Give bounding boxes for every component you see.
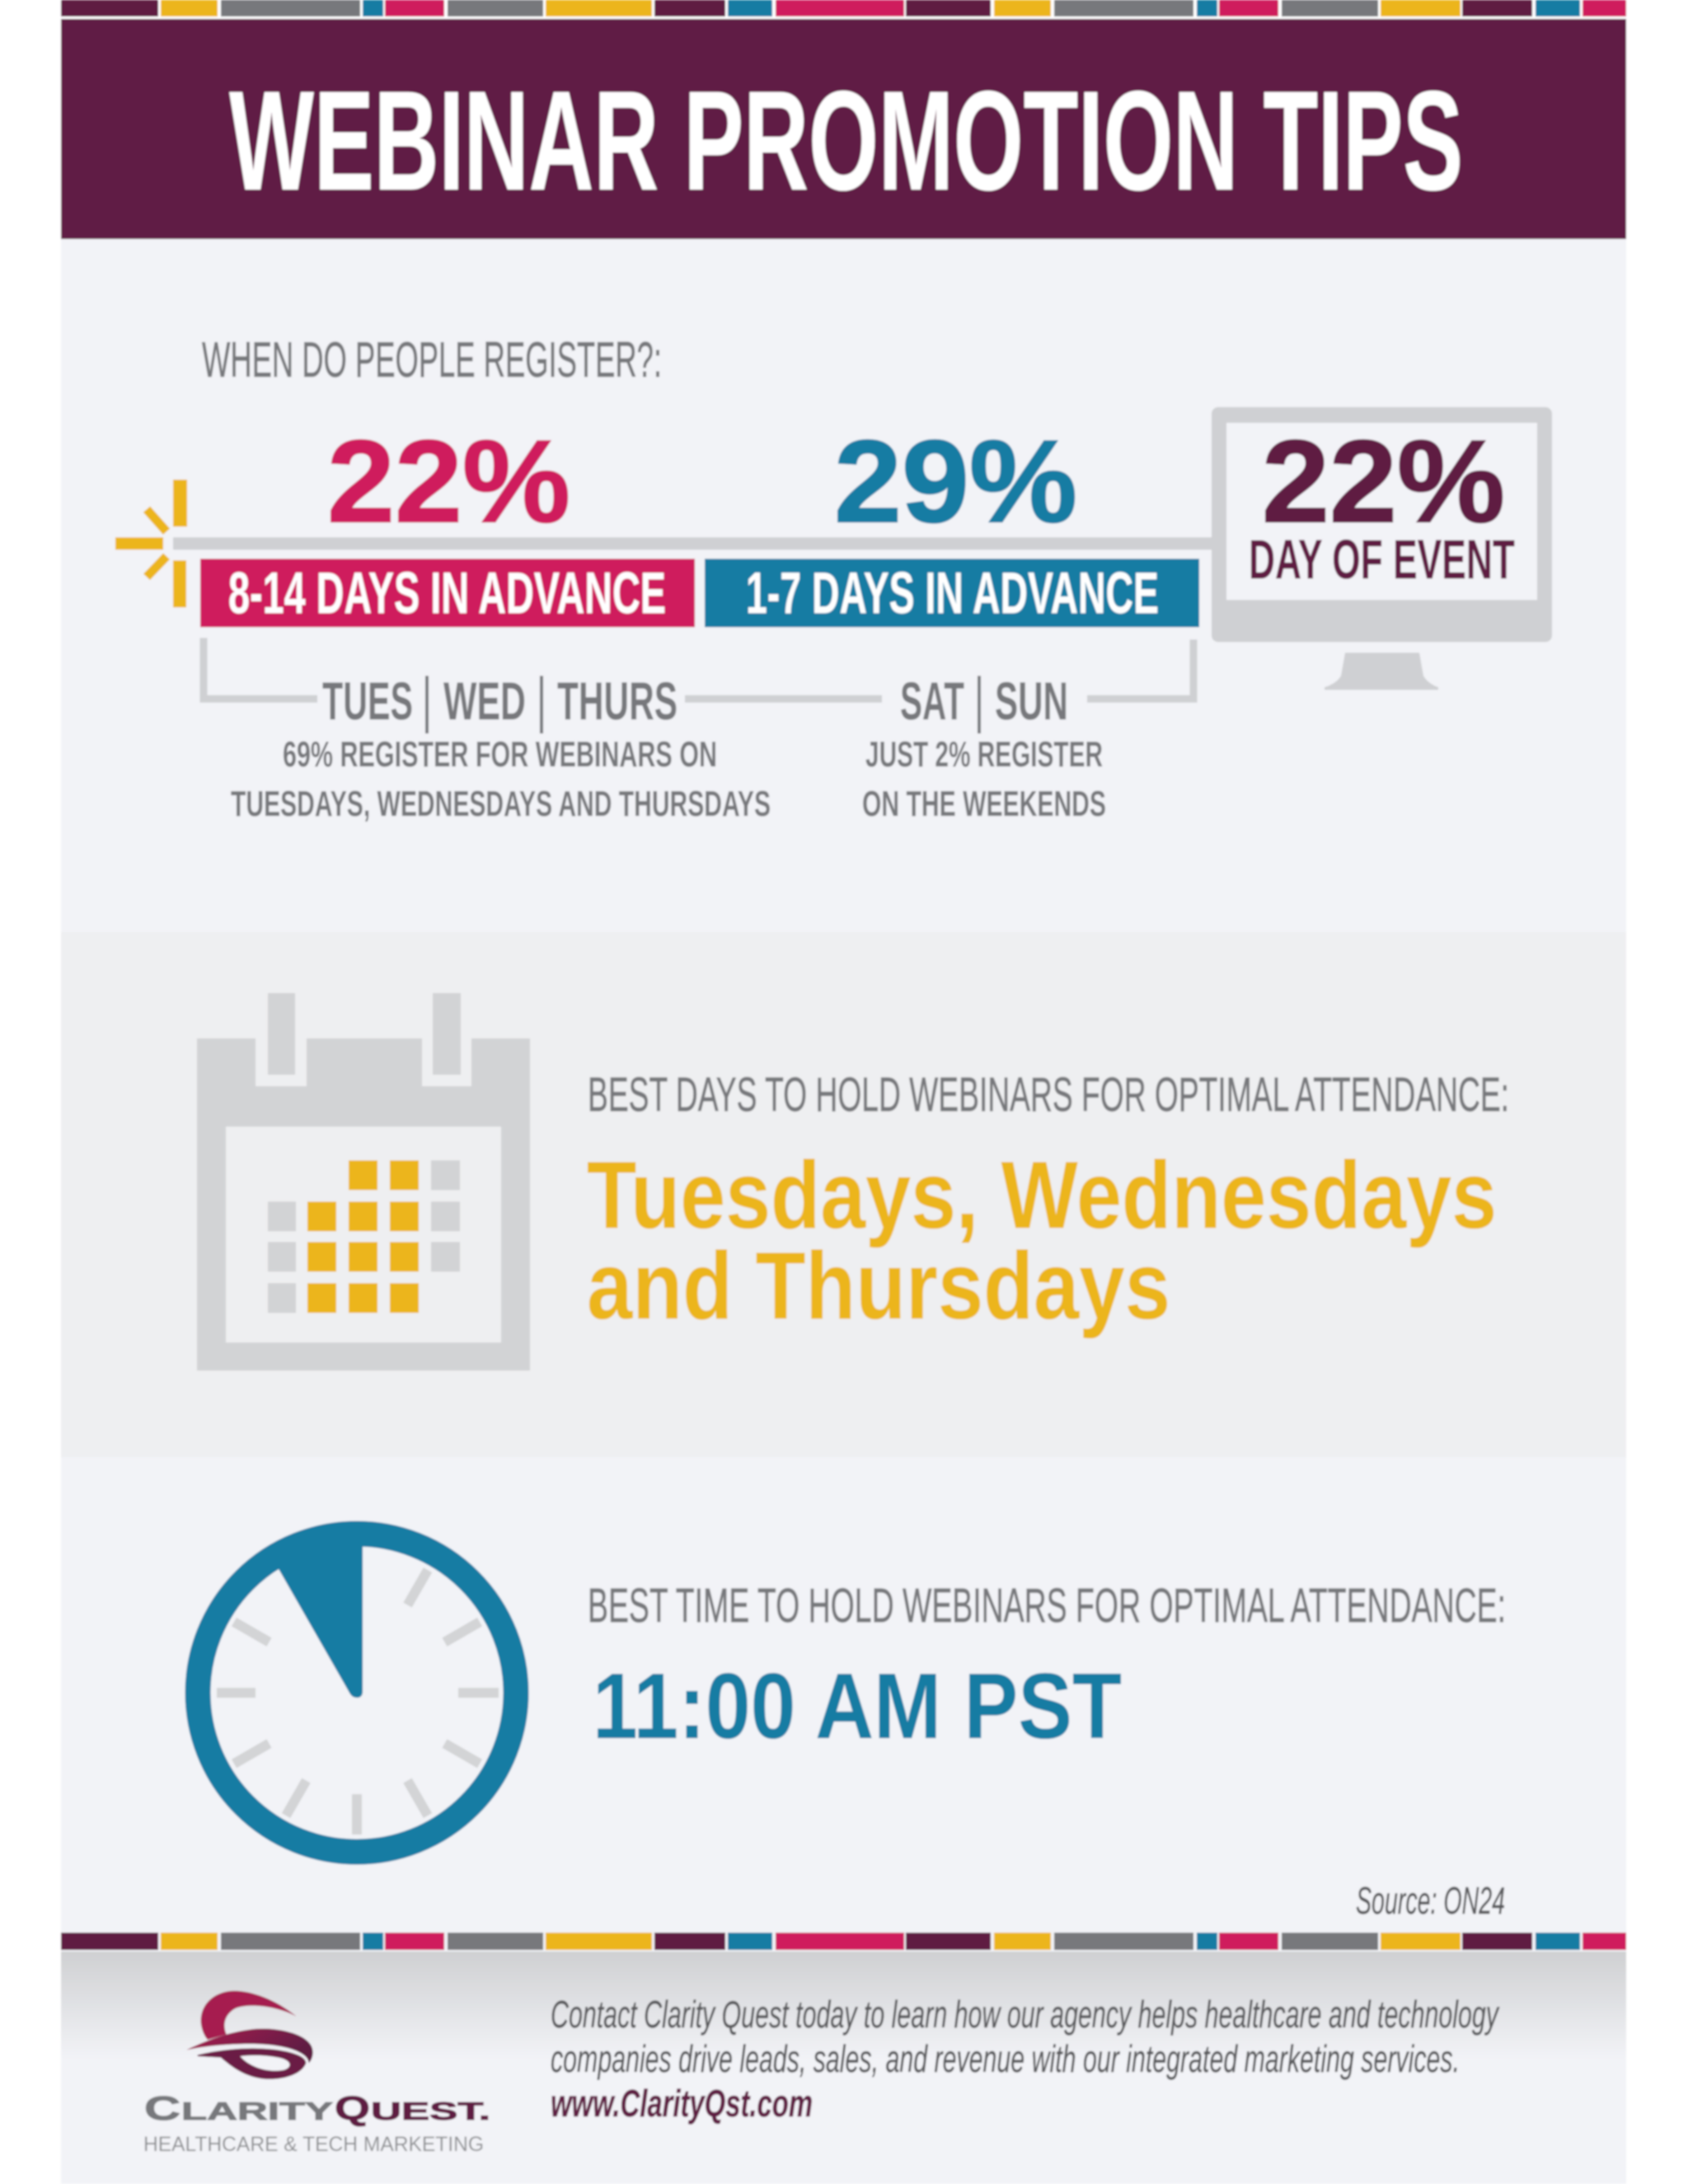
title banner: [61, 19, 1626, 239]
stat: 22 percent day of event: 22%: [1262, 416, 1505, 547]
weekend label: SAT: [900, 671, 964, 731]
bar: 8-14 days in advance: [200, 559, 695, 627]
source: Source: ON24: [1356, 1879, 1505, 1922]
logo wordmark: LARITY: [181, 2097, 334, 2125]
panel: footer: [61, 1952, 1626, 2156]
panel: best time: [198, 1534, 1506, 1922]
icon: calendar: [197, 993, 530, 1371]
weekend description: [862, 734, 1106, 824]
weekdays description: 69% REGISTER FOR WEBINARS ON: [283, 734, 717, 775]
icon: monitor: [1212, 407, 1552, 690]
best time answer: 11:00 AM PST: [593, 1654, 1122, 1758]
weekdays label: WED: [443, 671, 526, 731]
weekend label: SUN: [995, 671, 1068, 731]
logo wordmark: UEST.: [371, 2097, 490, 2125]
icon: clock: [198, 1534, 516, 1852]
label: day of event: DAY OF EVENT: [1249, 528, 1515, 591]
logo wordmark: Q: [335, 2089, 370, 2127]
bracket: [204, 638, 1193, 699]
logo tagline: HEALTHCARE & TECH MARKETING: [143, 2133, 484, 2156]
best days answer: and Thursdays: [587, 1232, 1170, 1339]
weekdays description: TUESDAYS, WEDNESDAYS AND THURSDAYS: [231, 784, 771, 824]
bar: 8-14 days in advance: 8-14 DAYS IN ADVANCE: [228, 561, 666, 626]
bar: 1-7 days in advance: 1-7 DAYS IN ADVANCE: [746, 561, 1159, 626]
weekend description: JUST 2% REGISTER: [865, 734, 1103, 775]
panel: when do people register: [115, 332, 1552, 824]
panel: best days: [61, 932, 1626, 1457]
bottom colour strip: [61, 1933, 1626, 1950]
weekend description: ON THE WEEKENDS: [862, 784, 1106, 824]
logo: clarity quest: [143, 1991, 490, 2156]
logo wordmark: C: [144, 2089, 181, 2127]
weekdays label: THURS: [557, 671, 678, 731]
stat: 29 percent 1-7 days: 29%: [834, 416, 1077, 547]
icon: starburst: [115, 480, 187, 607]
icon: logo swoosh: [186, 1991, 313, 2079]
footer contact text: [551, 1993, 1500, 2125]
timeline line: [173, 537, 1216, 550]
heading: WHEN DO PEOPLE REGISTER?:: [202, 332, 662, 387]
logo wordmark: [144, 2089, 490, 2127]
weekend label: [900, 671, 1068, 733]
best days answer: [587, 1141, 1497, 1339]
top colour strip: [61, 0, 1626, 16]
weekdays description: [231, 734, 771, 824]
bar: 1-7 days in advance: [705, 559, 1199, 627]
weekdays label: [322, 671, 678, 733]
best days answer: Tuesdays, Wednesdays: [587, 1141, 1497, 1249]
stat: 22 percent 8-14 days: 22%: [327, 416, 570, 547]
weekdays label: TUES: [322, 671, 413, 731]
footer url: www.ClarityQst.com: [551, 2082, 813, 2125]
